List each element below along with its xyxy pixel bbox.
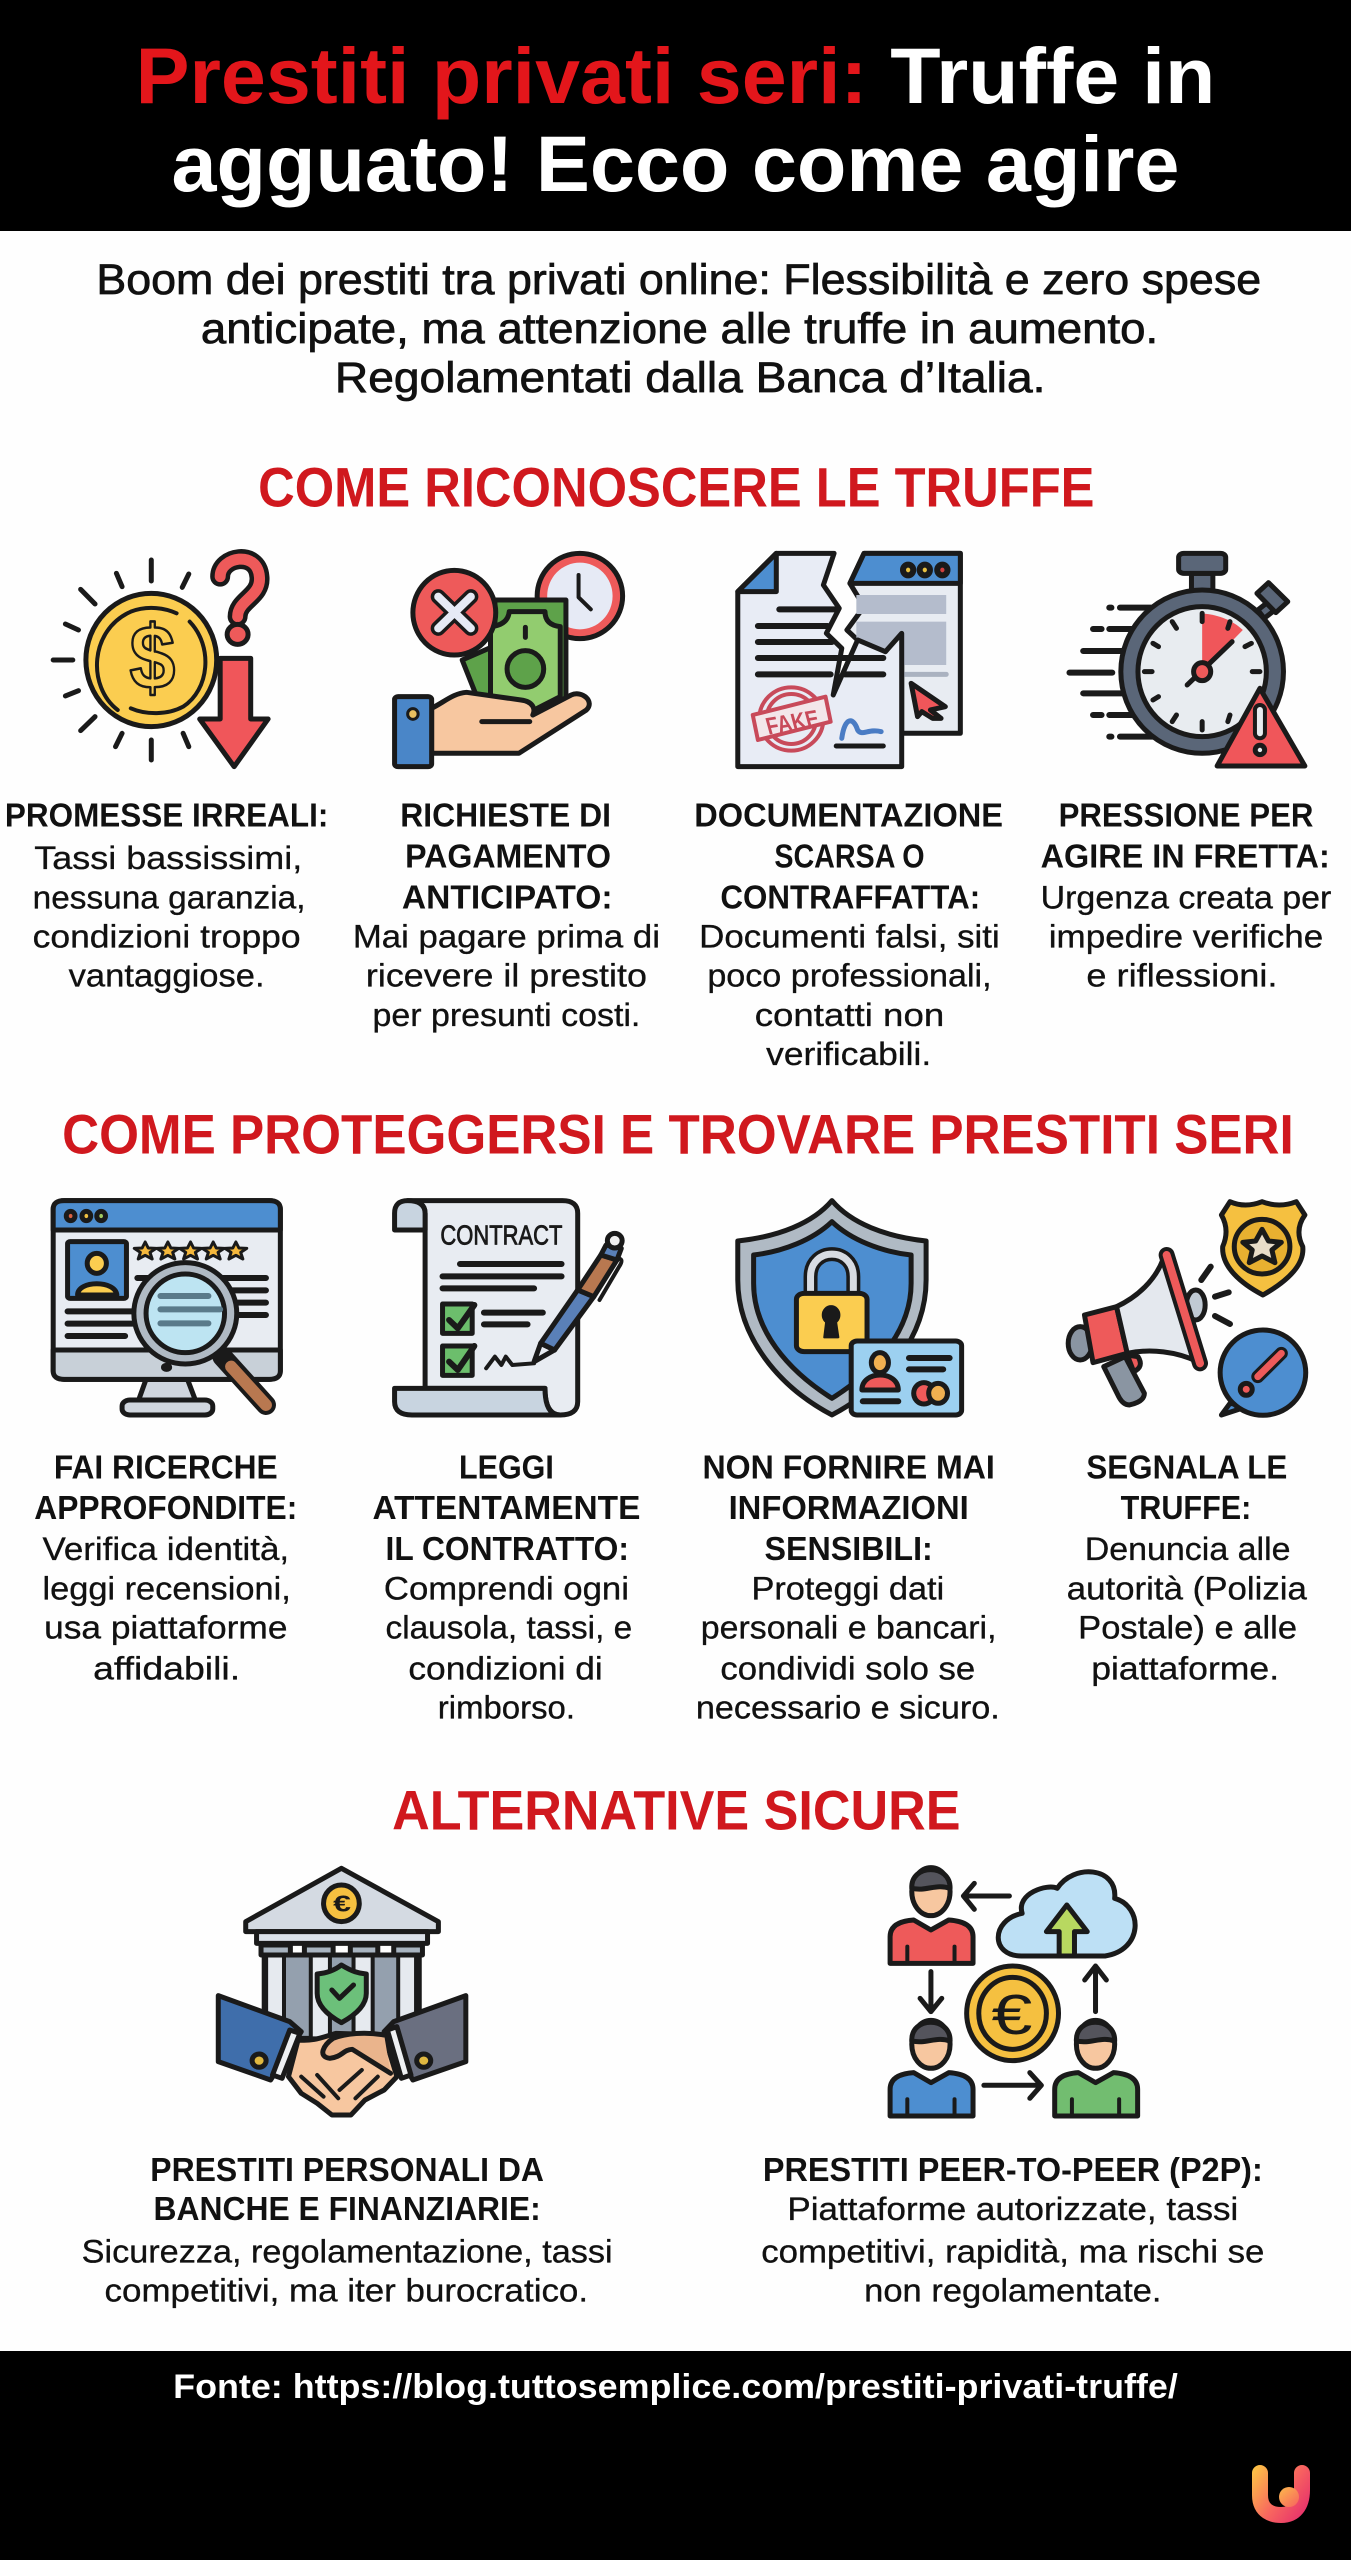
text: documentazione scarsa o contraffatta: contatti non: [755, 996, 944, 1033]
text: non fornire mai informazioni sensibili: INFORMAZIONI: [729, 1490, 969, 1527]
intro text: anticipate, ma attenzione alle truffe in aumento.: [201, 305, 1158, 352]
text: fai ricerche approfondite: Verifica identità,: [42, 1530, 289, 1567]
text: non fornire mai informazioni sensibili: condividi solo se: [720, 1649, 975, 1686]
icon: stopwatch with warning: [1069, 553, 1305, 766]
text: promesse irreali: PROMESSE IRREALI:: [5, 798, 328, 835]
text: richieste di pagamento anticipato: PAGAMENTO: [405, 838, 611, 875]
text: fai ricerche approfondite: leggi recensioni,: [42, 1569, 291, 1606]
text: richieste di pagamento anticipato: per presunti costi.: [372, 996, 640, 1033]
text: richieste di pagamento anticipato: RICHIESTE DI: [400, 798, 611, 835]
text: pressione per agire in fretta: PRESSIONE PER: [1059, 798, 1313, 835]
text: prestiti peer-to-peer: PRESTITI PEER-TO-PEER (P2P):: [763, 2152, 1263, 2189]
text: segnala le truffe: [1067, 1449, 1308, 1686]
text: promesse irreali: nessuna garanzia,: [33, 878, 305, 915]
icon: money in hand with cross and clock: [395, 553, 623, 767]
text: documentazione scarsa o contraffatta: SCARSA O: [774, 838, 925, 875]
text: documentazione scarsa o contraffatta: Documenti falsi, siti: [699, 917, 1000, 954]
text: promesse irreali: Tassi bassissimi,: [34, 839, 302, 876]
text: non fornire mai informazioni sensibili: NON FORNIRE MAI: [702, 1449, 995, 1486]
text: non fornire mai informazioni sensibili: necessario e sicuro.: [696, 1689, 1000, 1726]
text: pressione per agire in fretta: e riflessioni.: [1086, 957, 1277, 994]
text: leggi attentamente il contratto: Comprendi ogni: [384, 1569, 629, 1606]
text: segnala le truffe: piattaforme.: [1091, 1649, 1279, 1686]
text: non fornire mai informazioni sensibili: SENSIBILI:: [765, 1531, 933, 1568]
text: fai ricerche approfondite: APPROFONDITE:: [34, 1490, 297, 1527]
text: leggi attentamente il contratto: [372, 1449, 640, 1726]
text: leggi attentamente il contratto: clausola, tassi, e: [386, 1609, 632, 1646]
heading: alternative sicure: ALTERNATIVE SICURE: [392, 1780, 961, 1842]
text: pressione per agire in fretta: AGIRE IN FRETTA:: [1041, 838, 1330, 875]
header banner: Truffe in: [890, 32, 1215, 120]
text: non fornire mai informazioni sensibili: [696, 1449, 1000, 1726]
icon: torn fake document and website: FAKE: [763, 705, 822, 740]
footer: [0, 2351, 1351, 2560]
text: pressione per agire in fretta: [1041, 798, 1332, 994]
icon: website review under magnifier: [53, 1201, 280, 1415]
text: promesse irreali: [5, 798, 328, 994]
icon: megaphone, police badge and alert bubble: [1068, 1202, 1306, 1415]
text: segnala le truffe: SEGNALA LE: [1086, 1449, 1287, 1486]
text: documentazione scarsa o contraffatta: CONTRAFFATTA:: [720, 879, 980, 916]
source line: Fonte: https://blog.tuttosemplice.com/prestiti-privati-truffe/: [173, 2368, 1178, 2406]
text: prestiti peer-to-peer: [761, 2152, 1264, 2309]
text: pressione per agire in fretta: Urgenza creata per: [1041, 878, 1332, 915]
intro text: Boom dei prestiti tra privati online: Flessibilità e zero spese: [96, 256, 1261, 303]
text: non fornire mai informazioni sensibili: Proteggi dati: [751, 1569, 944, 1606]
text: fai ricerche approfondite: FAI RICERCHE: [54, 1449, 278, 1486]
text: prestiti personali: BANCHE E FINANZIARIE:: [154, 2191, 541, 2228]
icon: peer-to-peer lending cycle: €: [992, 1984, 1032, 2046]
text: documentazione scarsa o contraffatta: verificabili.: [766, 1035, 931, 1072]
text: leggi attentamente il contratto: rimborso.: [438, 1689, 575, 1726]
icon: torn fake document and website: [738, 553, 960, 767]
text: leggi attentamente il contratto: ATTENTAMENTE: [372, 1490, 640, 1527]
text: richieste di pagamento anticipato: ANTICIPATO:: [402, 879, 613, 916]
text: prestiti peer-to-peer: competitivi, rapidità, ma rischi se: [761, 2233, 1264, 2270]
text: richieste di pagamento anticipato: [353, 798, 660, 1033]
text: documentazione scarsa o contraffatta: poco professionali,: [707, 957, 992, 994]
icon: coin with falling rate: $: [129, 608, 175, 708]
text: non fornire mai informazioni sensibili: personali e bancari,: [701, 1609, 996, 1646]
icon: peer-to-peer lending cycle: [890, 1868, 1138, 2116]
logo: [1260, 2473, 1302, 2515]
text: promesse irreali: vantaggiose.: [69, 957, 265, 994]
text: leggi attentamente il contratto: condizioni di: [408, 1649, 603, 1686]
text: prestiti personali: PRESTITI PERSONALI DA: [150, 2152, 544, 2189]
text: documentazione scarsa o contraffatta: DOCUMENTAZIONE: [694, 798, 1003, 835]
text: segnala le truffe: Denuncia alle: [1085, 1530, 1291, 1567]
text: richieste di pagamento anticipato: ricevere il prestito: [366, 957, 647, 994]
icon: contract and pen: CONTRACT: [440, 1219, 563, 1251]
text: pressione per agire in fretta: impedire verifiche: [1049, 917, 1323, 954]
header banner: Prestiti privati seri:: [136, 32, 867, 120]
text: richieste di pagamento anticipato: Mai pagare prima di: [353, 917, 660, 954]
text: segnala le truffe: autorità (Polizia: [1067, 1569, 1308, 1606]
heading: come riconoscere le truffe: COME RICONOSCERE LE TRUFFE: [258, 456, 1095, 518]
text: prestiti personali: Sicurezza, regolamentazione, tassi: [82, 2233, 613, 2270]
icon: bank with handshake: €: [333, 1891, 351, 1917]
icon: bank with handshake: [218, 1868, 466, 2115]
icon: contract and pen: [395, 1201, 622, 1415]
text: fai ricerche approfondite: affidabili.: [93, 1649, 240, 1686]
icon: coin with falling rate: [53, 559, 268, 767]
text: promesse irreali: condizioni troppo: [33, 917, 301, 954]
header banner: [0, 0, 1351, 231]
text: prestiti personali: competitivi, ma iter burocratico.: [105, 2272, 588, 2309]
text: leggi attentamente il contratto: IL CONTRATTO:: [386, 1531, 629, 1568]
text: segnala le truffe: TRUFFE:: [1121, 1490, 1251, 1527]
text: segnala le truffe: Postale) e alle: [1078, 1609, 1297, 1646]
text: prestiti peer-to-peer: non regolamentate.: [864, 2272, 1161, 2309]
intro text: Regolamentati dalla Banca d’Italia.: [335, 354, 1046, 401]
text: leggi attentamente il contratto: LEGGI: [459, 1449, 554, 1486]
text: prestiti personali: [82, 2152, 613, 2309]
text: documentazione scarsa o contraffatta: [694, 798, 1003, 1072]
text: fai ricerche approfondite: [34, 1449, 297, 1686]
icon: shield with padlock and id card: [738, 1201, 962, 1415]
text: fai ricerche approfondite: usa piattaforme: [44, 1609, 288, 1646]
header banner: agguato! Ecco come agire: [172, 120, 1179, 208]
intro text: [96, 256, 1261, 401]
text: prestiti peer-to-peer: Piattaforme autorizzate, tassi: [787, 2190, 1238, 2227]
